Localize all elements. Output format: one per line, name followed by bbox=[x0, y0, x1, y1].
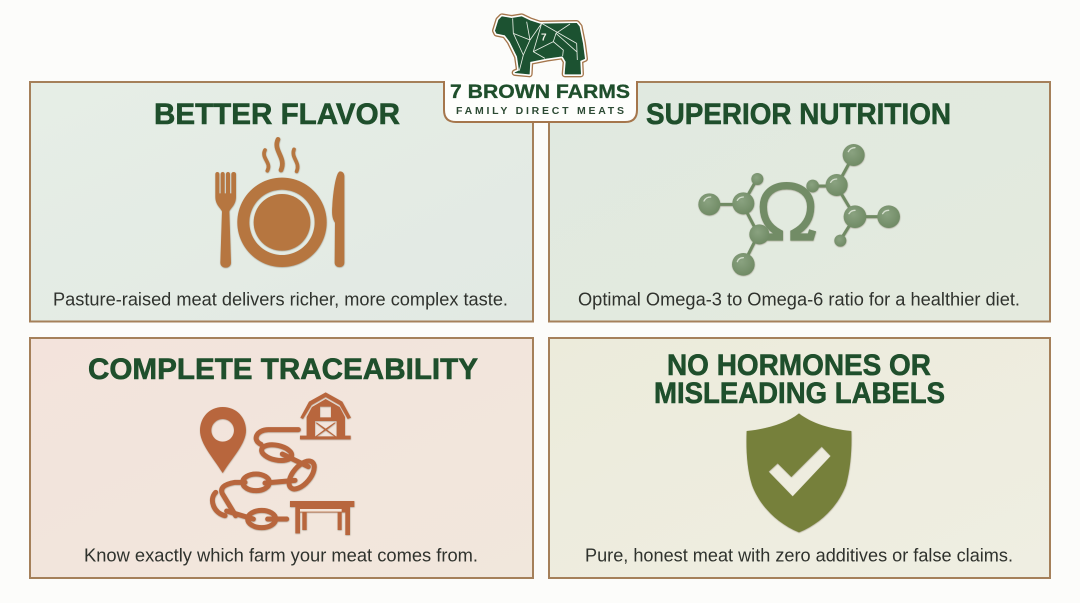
logo plate bbox=[444, 81, 637, 122]
body text: no hormones: Pure, honest meat with zero additives or false claims. bbox=[585, 546, 1013, 566]
heading: no hormones or misleading labels: MISLEADING LABELS bbox=[654, 377, 945, 410]
heading: superior nutrition: SUPERIOR NUTRITION bbox=[646, 98, 951, 131]
heading: better flavor: BETTER FLAVOR bbox=[154, 98, 400, 131]
body text: complete traceability: Know exactly which farm your meat comes from. bbox=[84, 546, 478, 566]
panel: no hormones bbox=[549, 338, 1050, 578]
tagline: FAMILY DIRECT MEATS bbox=[456, 105, 624, 117]
heading: no hormones or misleading labels bbox=[654, 349, 945, 410]
panel: better flavor bbox=[30, 82, 533, 322]
icon: omega molecule bbox=[698, 144, 900, 276]
heading: complete traceability: COMPLETE TRACEABILITY bbox=[88, 353, 478, 386]
icon: pin, chain, barn and table bbox=[200, 392, 354, 535]
body text: superior nutrition: Optimal Omega-3 to Omega-6 ratio for a healthier diet. bbox=[578, 290, 1020, 310]
body text: better flavor: Pasture-raised meat delivers richer, more complex taste. bbox=[53, 290, 508, 310]
icon: shield with check mark bbox=[746, 413, 851, 532]
brand name: 7 BROWN FARMS bbox=[450, 82, 630, 103]
panel: superior nutrition bbox=[549, 82, 1050, 322]
icon: plate with fork, knife and steam bbox=[215, 139, 344, 268]
panel: complete traceability bbox=[30, 338, 533, 578]
icon: cow: 7 bbox=[541, 33, 547, 44]
heading: no hormones or misleading labels: NO HORMONES OR bbox=[667, 349, 931, 382]
icon: cow bbox=[495, 17, 585, 74]
logo bbox=[444, 17, 637, 122]
